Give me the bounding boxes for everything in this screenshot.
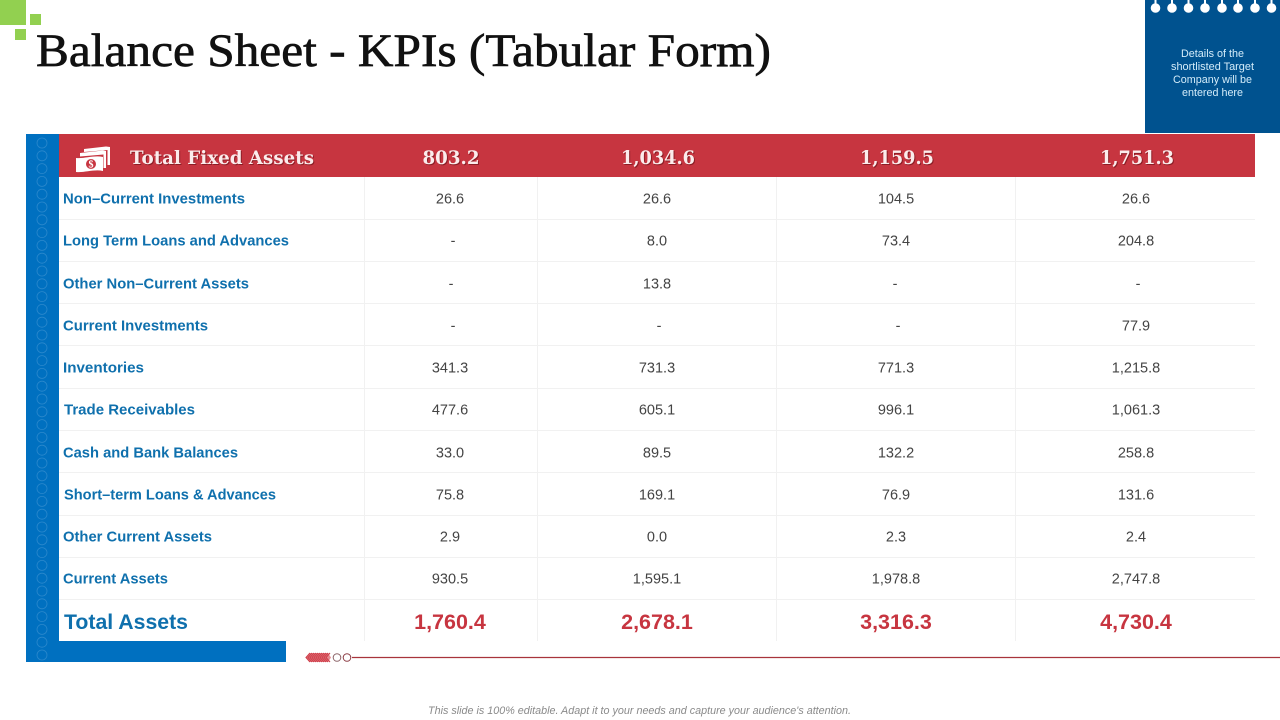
notepad callout: Company will be: [1173, 74, 1252, 86]
row: Other Current Assets: 2.3: [886, 530, 906, 546]
row: Other Current Assets: 2.9: [440, 530, 460, 546]
table header bar: Total Fixed Assets: [130, 148, 314, 169]
title: Balance Sheet - KPIs (Tabular Form): [36, 25, 771, 77]
row: Current Investments: -: [657, 318, 662, 334]
row: Other Current Assets: 2.4: [1126, 530, 1146, 546]
row: Long Term Loans and Advances: 73.4: [882, 234, 910, 250]
table grid lines: [59, 177, 1255, 641]
row: Total Assets: 3,316.3: [860, 610, 932, 634]
footer note: This slide is 100% editable. Adapt it to your needs and capture your audience's attention.: [428, 705, 851, 717]
row: Short-term Loans & Advances: 76.9: [882, 488, 910, 504]
row: Long Term Loans and Advances: [63, 232, 1154, 250]
row: Short-term Loans & Advances: [64, 486, 1154, 504]
row: Non-Current Investments: 104.5: [878, 192, 914, 208]
row: Current Investments: -: [451, 318, 456, 334]
row: Cash and Bank Balances: 33.0: [436, 446, 464, 462]
decorative chevron line: [306, 653, 1280, 662]
icon: banknotes: $: [88, 160, 94, 170]
row: Trade Receivables: [64, 402, 1160, 418]
row: Long Term Loans and Advances: 8.0: [647, 234, 667, 250]
row: Cash and Bank Balances: [63, 444, 1154, 462]
row: Total Assets: Total Assets: [64, 610, 188, 634]
row: Short-term Loans & Advances: Short–term Loans & Advances: [64, 486, 276, 504]
row: Current Investments: 77.9: [1122, 318, 1150, 334]
row: Inventories: 771.3: [878, 360, 914, 376]
blue side frame: [26, 134, 286, 662]
row: Other Current Assets: 0.0: [647, 530, 667, 546]
row: Other Non-Current Assets: -: [893, 276, 898, 292]
row: Trade Receivables: 477.6: [432, 402, 468, 418]
row: Trade Receivables: Trade Receivables: [64, 402, 195, 418]
row: Short-term Loans & Advances: 169.1: [639, 488, 675, 504]
row: Other Non-Current Assets: -: [1136, 276, 1141, 292]
row: Inventories: 341.3: [432, 360, 468, 376]
row: Other Non-Current Assets: -: [449, 276, 454, 292]
table header bar: 1,751.3: [1100, 148, 1174, 169]
row: Non-Current Investments: [63, 190, 1150, 208]
table header bar: 1,034.6: [621, 148, 695, 169]
row: Trade Receivables: 996.1: [878, 402, 914, 418]
row: Current Assets: [63, 570, 1160, 588]
row: Total Assets: [64, 610, 1172, 634]
row: Long Term Loans and Advances: 204.8: [1118, 234, 1154, 250]
row: Other Non-Current Assets: Other Non–Current Assets: [63, 276, 249, 292]
row: Total Assets: 2,678.1: [621, 610, 693, 634]
row: Non-Current Investments: 26.6: [643, 192, 671, 208]
row: Cash and Bank Balances: Cash and Bank Balances: [63, 444, 238, 462]
row: Trade Receivables: 605.1: [639, 402, 675, 418]
icon: banknotes: [76, 146, 110, 172]
row: Current Assets: 930.5: [432, 572, 468, 588]
table header bar: 1,159.5: [860, 148, 934, 169]
row: Current Assets: Current Assets: [63, 570, 168, 588]
row: Current Investments: Current Investments: [63, 318, 208, 334]
row: Inventories: 731.3: [639, 360, 675, 376]
row: Non-Current Investments: Non–Current Investments: [63, 190, 245, 208]
row: Inventories: Inventories: [63, 360, 144, 376]
row: Short-term Loans & Advances: 131.6: [1118, 488, 1154, 504]
row: Other Current Assets: Other Current Assets: [63, 528, 212, 546]
row: Other Non-Current Assets: [63, 276, 1141, 292]
row: Short-term Loans & Advances: 75.8: [436, 488, 464, 504]
row: Current Investments: -: [896, 318, 901, 334]
row: Other Non-Current Assets: 13.8: [643, 276, 671, 292]
notepad callout: entered here: [1182, 87, 1243, 99]
row: Cash and Bank Balances: 89.5: [643, 446, 671, 462]
table header bar: 803.2: [422, 148, 480, 169]
row: Current Assets: 1,595.1: [633, 572, 681, 588]
row: Other Current Assets: [63, 528, 1146, 546]
row: Non-Current Investments: 26.6: [436, 192, 464, 208]
row: Cash and Bank Balances: 132.2: [878, 446, 914, 462]
row: Inventories: [63, 360, 1160, 376]
row: Current Assets: 2,747.8: [1112, 572, 1160, 588]
notepad callout: Details of the: [1181, 48, 1244, 60]
row: Cash and Bank Balances: 258.8: [1118, 446, 1154, 462]
decorative green squares: [0, 0, 41, 40]
row: Total Assets: 4,730.4: [1100, 610, 1172, 634]
row: Long Term Loans and Advances: -: [451, 234, 456, 250]
row: Trade Receivables: 1,061.3: [1112, 402, 1160, 418]
row: Current Investments: [63, 318, 1150, 334]
row: Long Term Loans and Advances: Long Term Loans and Advances: [63, 232, 289, 250]
row: Inventories: 1,215.8: [1112, 360, 1160, 376]
notepad callout: shortlisted Target: [1171, 61, 1254, 73]
row: Current Assets: 1,978.8: [872, 572, 920, 588]
row: Non-Current Investments: 26.6: [1122, 192, 1150, 208]
notepad callout: [1145, 0, 1280, 133]
table header bar: [59, 134, 1255, 177]
row: Total Assets: 1,760.4: [414, 610, 486, 634]
